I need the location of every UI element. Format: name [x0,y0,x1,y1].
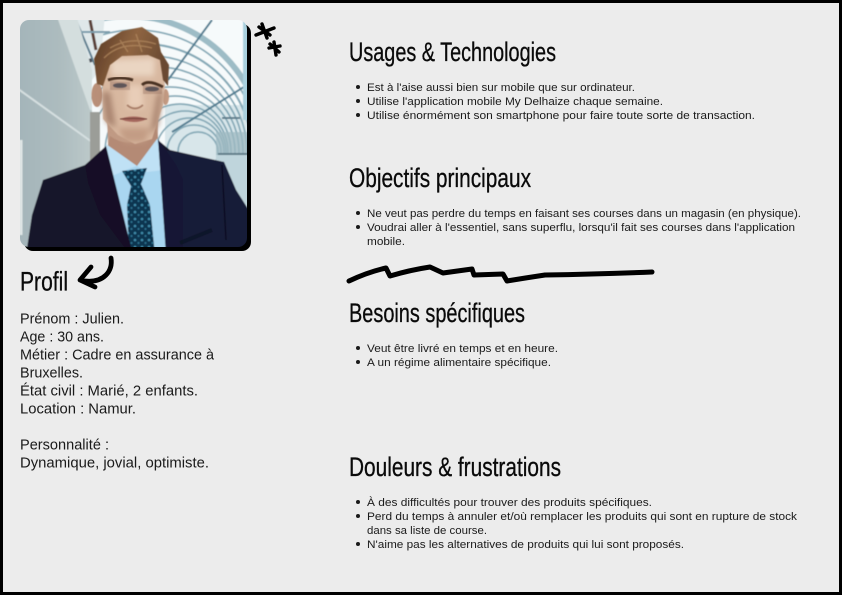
tunnel left beams [78,20,105,80]
eyes and brows [108,78,163,94]
list: douleurs: dans sa liste de course. [367,525,487,537]
icon: curved arrow [80,258,111,287]
list: objectifs [356,208,801,248]
heading: profil: Profil [20,266,68,296]
list: douleurs: À des difficultés pour trouver des produits spécifiques. [367,496,652,509]
text block: profile details: Dynamique, jovial, optimiste. [20,456,209,472]
collar [106,144,137,176]
squiggle divider [349,267,652,281]
list: usages [356,82,755,122]
tie [122,168,155,255]
list: objectifs: Voudrai aller à l'essentiel, sans superflu, lorsqu'il fait ses courses dans l'application [367,222,795,234]
list: douleurs [356,496,797,551]
list: usages: Utilise l'application mobile My Delhaize chaque semaine. [367,96,663,108]
list: usages: Utilise énormément son smartphone pour faire toute sorte de transaction. [367,110,755,122]
lapels [86,146,132,247]
text block: profile details: Location : Namur. [20,402,136,418]
face shading [102,58,163,142]
heading: douleurs: Douleurs & frustrations [349,452,561,482]
text block: profile details [20,312,214,472]
text block: profile details: Métier : Cadre en assurance à [20,348,214,364]
nose and mouth [120,105,147,122]
suit [26,141,247,247]
text block: profile details: Age : 30 ans. [20,330,104,346]
icon: sparkle stars [256,24,280,55]
face [102,52,165,144]
heading: usages: Usages & Technologies [349,37,556,67]
hair [94,27,169,86]
ears [92,83,169,107]
text block: profile details: Prénom : Julien. [20,312,124,328]
list: objectifs: mobile. [367,236,405,248]
list: besoins: Veut être livré en temps et en heure. [367,343,558,355]
list: besoins [356,343,558,369]
heading: besoins: Besoins spécifiques [349,298,525,328]
text block: profile details: Bruxelles. [20,366,83,382]
panel: profile photo [20,20,251,251]
heading: objectifs: Objectifs principaux [349,163,531,193]
neck [106,120,158,146]
photo shadow [24,24,251,251]
shirt [106,140,166,255]
portrait photo [20,20,247,247]
text block: profile details: État civil : Marié, 2 enfants. [20,382,198,400]
list: objectifs: Ne veut pas perdre du temps en faisant ses courses dans un magasin (en physique). [367,208,801,220]
hair strands [104,34,156,58]
list: usages: Est à l'aise aussi bien sur mobile que sur ordinateur. [367,82,635,94]
concrete wall [20,20,92,247]
text block: profile details: Personnalité : [20,438,109,454]
list: besoins: A un régime alimentaire spécifique. [367,357,551,369]
list: douleurs: Perd du temps à annuler et/où remplacer les produits qui sont en rupture de stock [367,511,797,523]
list: douleurs: N'aime pas les alternatives de produits qui lui sont proposés. [367,539,684,551]
